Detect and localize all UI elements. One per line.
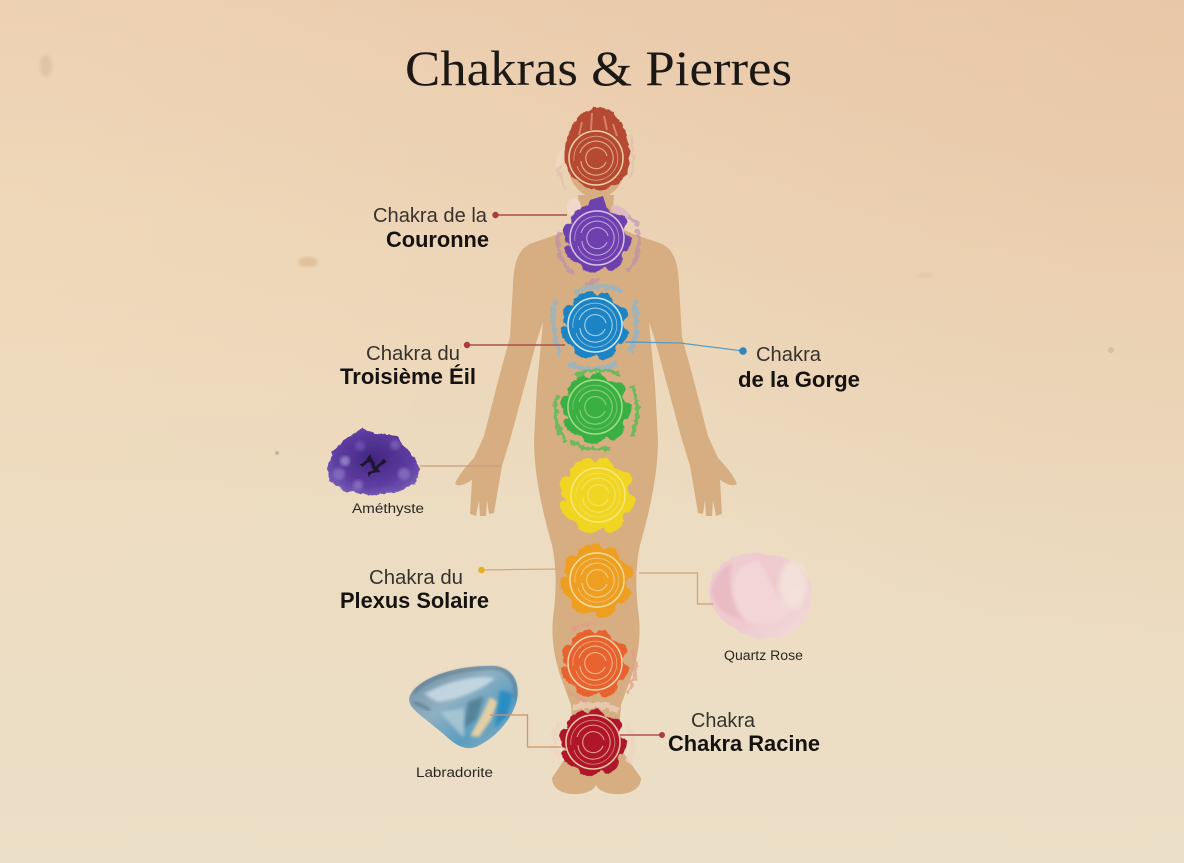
connector: labradorite <box>490 715 561 747</box>
chakra: root red <box>554 704 632 780</box>
chakra: solar yellow <box>550 448 644 542</box>
connector: plexus <box>478 567 560 573</box>
label: gorge: de la Gorge <box>738 367 860 392</box>
label: couronne <box>373 205 489 252</box>
stone: labradorite <box>409 666 518 748</box>
chakra: throat blue <box>550 280 640 370</box>
body silhouette <box>455 195 737 794</box>
label: racine <box>668 710 820 756</box>
title: Chakras & Pierres <box>405 40 792 96</box>
label: troisieme oeil <box>340 343 476 389</box>
connector: troisieme oeil <box>464 342 565 348</box>
chakra: heart green <box>556 369 637 449</box>
connector: gorge <box>625 342 747 355</box>
chakra: crown <box>553 107 634 190</box>
label: plexus solaire: Chakra du <box>369 567 463 589</box>
label: racine: Chakra Racine <box>668 731 820 756</box>
label: couronne: Chakra de la <box>373 205 488 227</box>
connector: amethyste <box>420 465 501 467</box>
connector: quartz rose <box>639 573 713 604</box>
connector: couronne <box>492 212 567 218</box>
label: racine: Chakra <box>691 710 756 732</box>
label: couronne: Couronne <box>386 227 489 252</box>
chakra: orange red <box>551 619 639 707</box>
head <box>567 122 627 198</box>
label: troisieme oeil: Chakra du <box>366 343 460 365</box>
label: gorge: Chakra <box>756 344 822 366</box>
label: plexus solaire <box>340 567 489 613</box>
stone: amethyst <box>327 428 420 495</box>
label: amethyste: Améthyste <box>352 501 424 516</box>
label: labradorite: Labradorite <box>416 765 493 780</box>
chakra: sacral orange <box>547 530 647 630</box>
chakra: third eye violet <box>557 196 639 284</box>
label: plexus solaire: Plexus Solaire <box>340 588 489 613</box>
stone: quartz rose <box>709 553 812 639</box>
label: troisieme oeil: Troisième Éil <box>340 364 476 389</box>
label: quartz rose: Quartz Rose <box>724 648 803 663</box>
label: gorge <box>738 344 860 392</box>
connector: racine <box>620 732 665 738</box>
